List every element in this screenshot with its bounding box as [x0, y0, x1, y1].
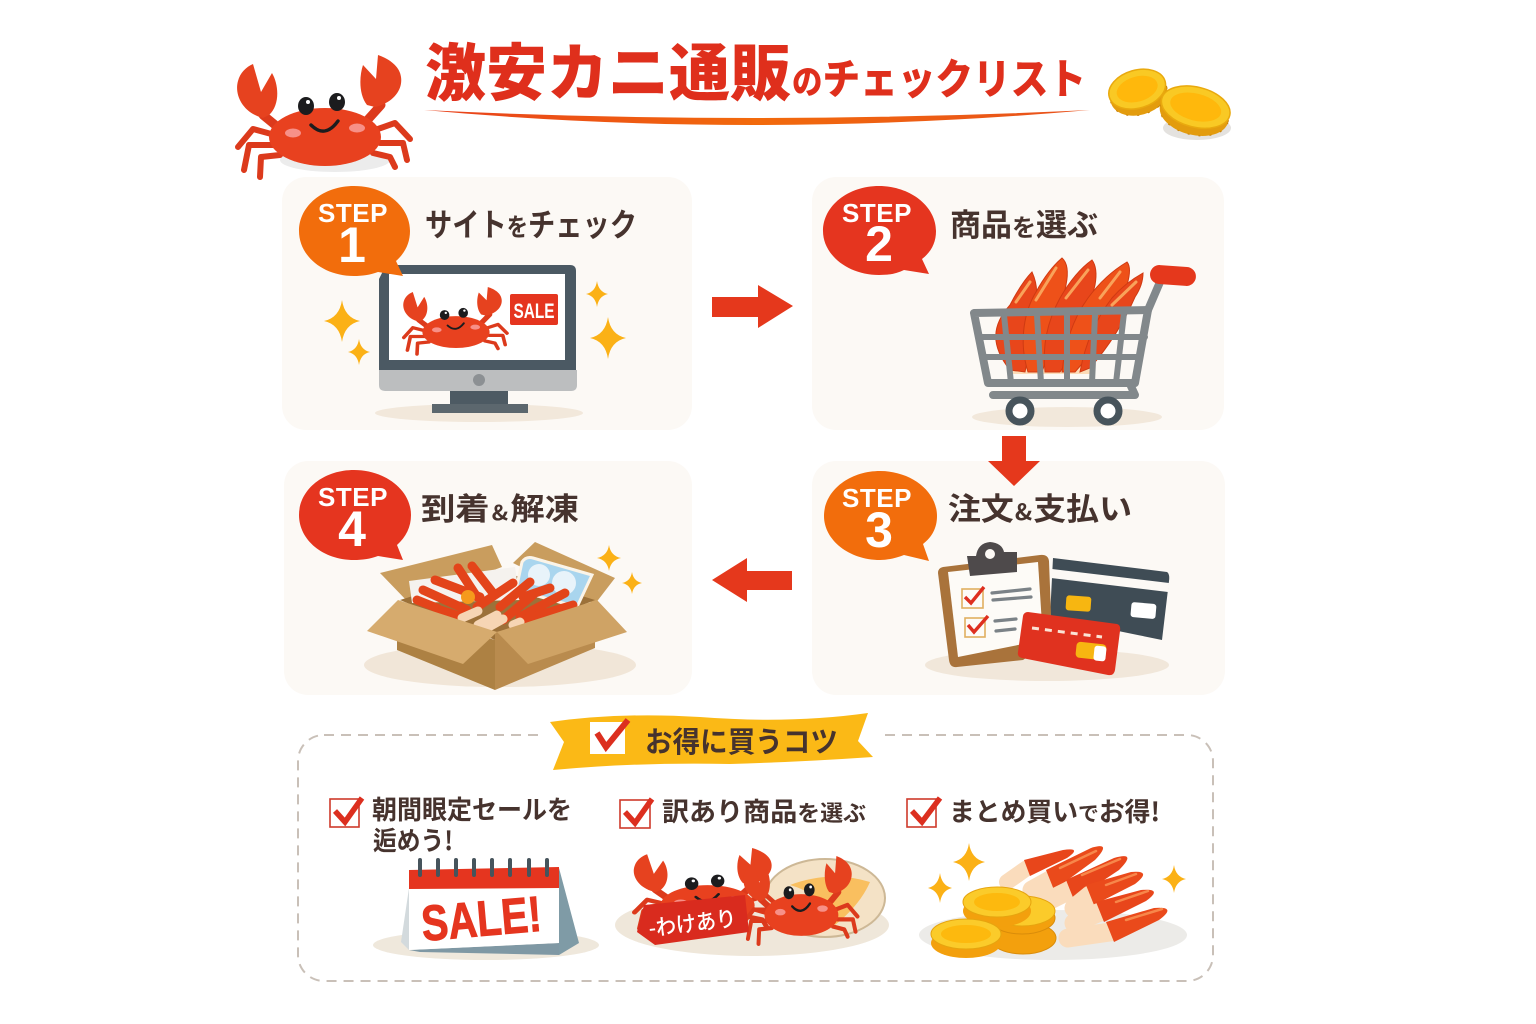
icon: computer monitor: SALE — [514, 300, 554, 323]
icon: sparkles — [597, 545, 642, 594]
panel: step 3 — [812, 461, 1225, 695]
tip 1: limited-time sale: 逅めう! — [373, 821, 453, 858]
tip 1: limited-time sale: 朝間眼定セールを — [372, 790, 572, 827]
tip 1: limited-time sale — [330, 790, 599, 960]
arrow: step 2 to 3 — [988, 436, 1040, 486]
badge: step 2: 2 — [865, 216, 893, 272]
badge: step 3 — [824, 471, 937, 561]
panel: tips — [298, 713, 1213, 981]
badge: step 1: STEP — [318, 198, 388, 228]
badge: step 3: 3 — [865, 502, 893, 558]
icon: sparkles — [324, 281, 626, 365]
icon: opened cardboard box with crab — [364, 542, 636, 690]
title: 激安カニ通販 — [425, 23, 791, 113]
tip 3: bulk buying — [907, 792, 1187, 960]
badge: step 3: STEP — [842, 483, 912, 513]
icon: sparkles — [928, 843, 1186, 903]
icon: red checkbox — [907, 798, 940, 827]
heading: step 4: 到着 &解凍 — [421, 484, 579, 529]
heading: step 1: サイトをチェック — [425, 200, 637, 246]
title: のチェックリスト — [792, 46, 1086, 107]
icon: red checkbox — [330, 798, 362, 827]
heading: step 3: 注文&支払い — [948, 484, 1132, 529]
panel: step 2 — [812, 177, 1224, 430]
arrow: step 1 to 2 — [712, 285, 793, 328]
icon: red checkbox — [620, 799, 652, 828]
icon: SALE calendar: SALE! — [419, 886, 544, 952]
banner: tips heading — [550, 713, 873, 770]
icon: computer monitor — [375, 265, 583, 422]
title — [425, 23, 1086, 113]
badge: step 2 — [823, 186, 936, 275]
tip 2: wakeari items: 訳あり商品を選ぶ — [662, 792, 866, 829]
title underline — [424, 110, 1090, 125]
badge: step 4: 4 — [338, 501, 366, 557]
icon: coins and crab legs — [919, 846, 1187, 960]
badge: step 4 — [299, 470, 411, 560]
title crab mascot — [237, 55, 410, 177]
badge: step 2: STEP — [842, 198, 912, 228]
banner: tips heading: お得に買うコツ — [645, 719, 838, 761]
icon: shopping cart with crab legs — [972, 258, 1197, 427]
badge: step 1 — [299, 186, 410, 276]
arrow: step 3 to 4 — [712, 558, 792, 602]
icon: SALE calendar — [373, 860, 599, 960]
heading: step 2: 商品を選ぶ — [950, 200, 1098, 245]
tip 3: bulk buying: まとめ買いでお得! — [949, 792, 1160, 829]
icon: checklist clipboard and credit cards — [925, 542, 1169, 681]
panel: step 4 — [284, 461, 692, 695]
icon: two crabs with wakeari tag — [615, 848, 889, 956]
title coins — [1104, 63, 1235, 143]
panel: step 1 — [282, 177, 692, 430]
icon: two crabs with wakeari tag: -わけあり — [647, 901, 738, 943]
tip 2: wakeari items — [615, 792, 889, 956]
badge: step 4: STEP — [318, 482, 388, 512]
badge: step 1: 1 — [338, 217, 366, 273]
